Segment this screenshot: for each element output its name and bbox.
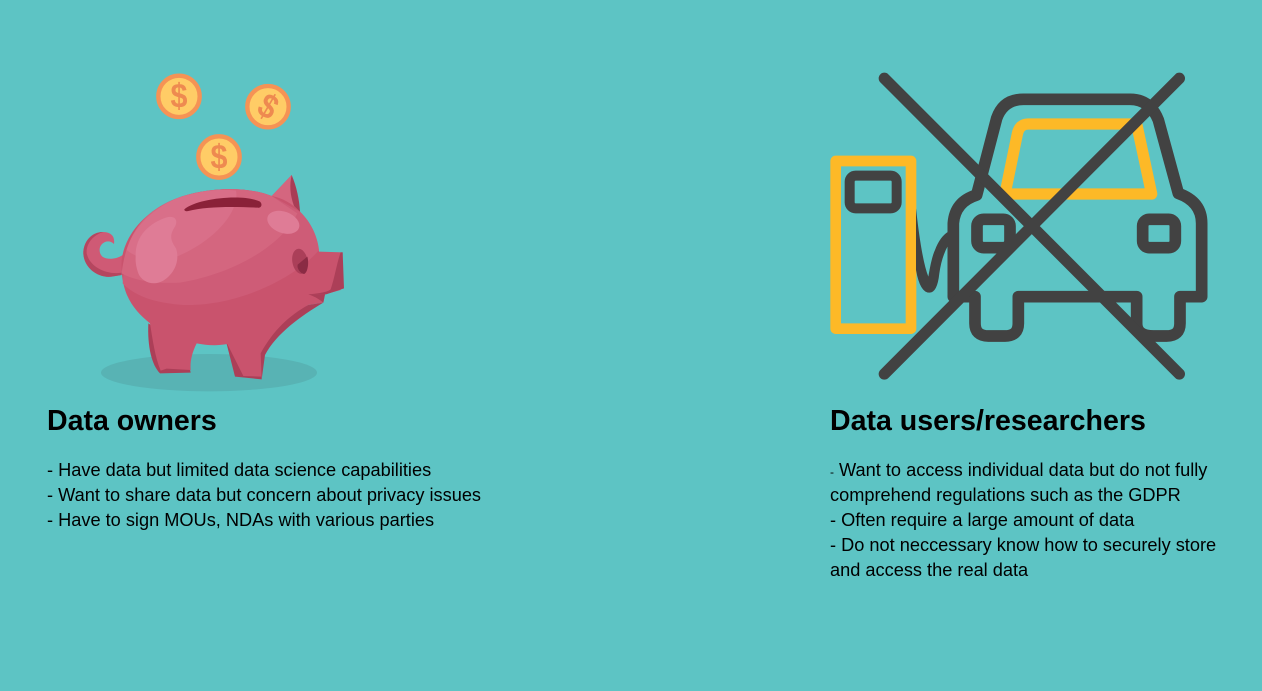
text: data users list: comprehend regulations such as the GDPR xyxy=(830,485,1181,505)
coin 1: $ xyxy=(171,76,187,115)
pig shadow xyxy=(101,354,317,391)
charging pump xyxy=(836,161,911,329)
text: data owners list: - Have to sign MOUs, NDAs with various parties xyxy=(47,510,434,530)
coin 3 xyxy=(198,136,240,178)
car body xyxy=(953,99,1202,336)
right headlight xyxy=(1143,219,1175,248)
icon: piggy bank with coins xyxy=(83,76,344,391)
left headlight xyxy=(977,219,1010,248)
text: data owners list xyxy=(47,460,481,530)
coin 2: $ xyxy=(251,85,286,127)
text: data users list: - Want to access individual data but do not fully xyxy=(830,460,1207,480)
pig ear xyxy=(272,175,300,212)
icon: crossed-out car and charging pump xyxy=(836,78,1202,374)
text: data users list: - Do not neccessary know how to securely store xyxy=(830,535,1216,555)
text: data users list: - Often require a large amount of data xyxy=(830,510,1134,530)
pig belly edge xyxy=(261,303,323,379)
pig coin slot xyxy=(184,198,261,211)
pig tail xyxy=(83,232,123,277)
text: data users list: and access the real data xyxy=(830,560,1028,580)
pig eye xyxy=(290,248,310,275)
windshield xyxy=(1005,124,1152,194)
heading: data owners: Data owners xyxy=(47,405,217,437)
pig highlights xyxy=(136,217,177,283)
text: data owners list: - Want to share data but concern about privacy issues xyxy=(47,485,481,505)
coin 3: $ xyxy=(211,136,227,176)
text: data users list xyxy=(830,460,1216,580)
pig rear shaded legs xyxy=(148,323,191,373)
charging hose xyxy=(916,208,948,293)
cross mark xyxy=(884,78,1179,374)
coin 1 xyxy=(158,76,200,117)
pump screen xyxy=(850,176,897,208)
pig body highlight bands xyxy=(123,189,319,305)
text: data owners list: - Have data but limited data science capabilities xyxy=(47,460,431,480)
pig body xyxy=(122,175,343,377)
heading: data users: Data users/researchers xyxy=(830,405,1146,437)
pig snout xyxy=(308,252,344,294)
